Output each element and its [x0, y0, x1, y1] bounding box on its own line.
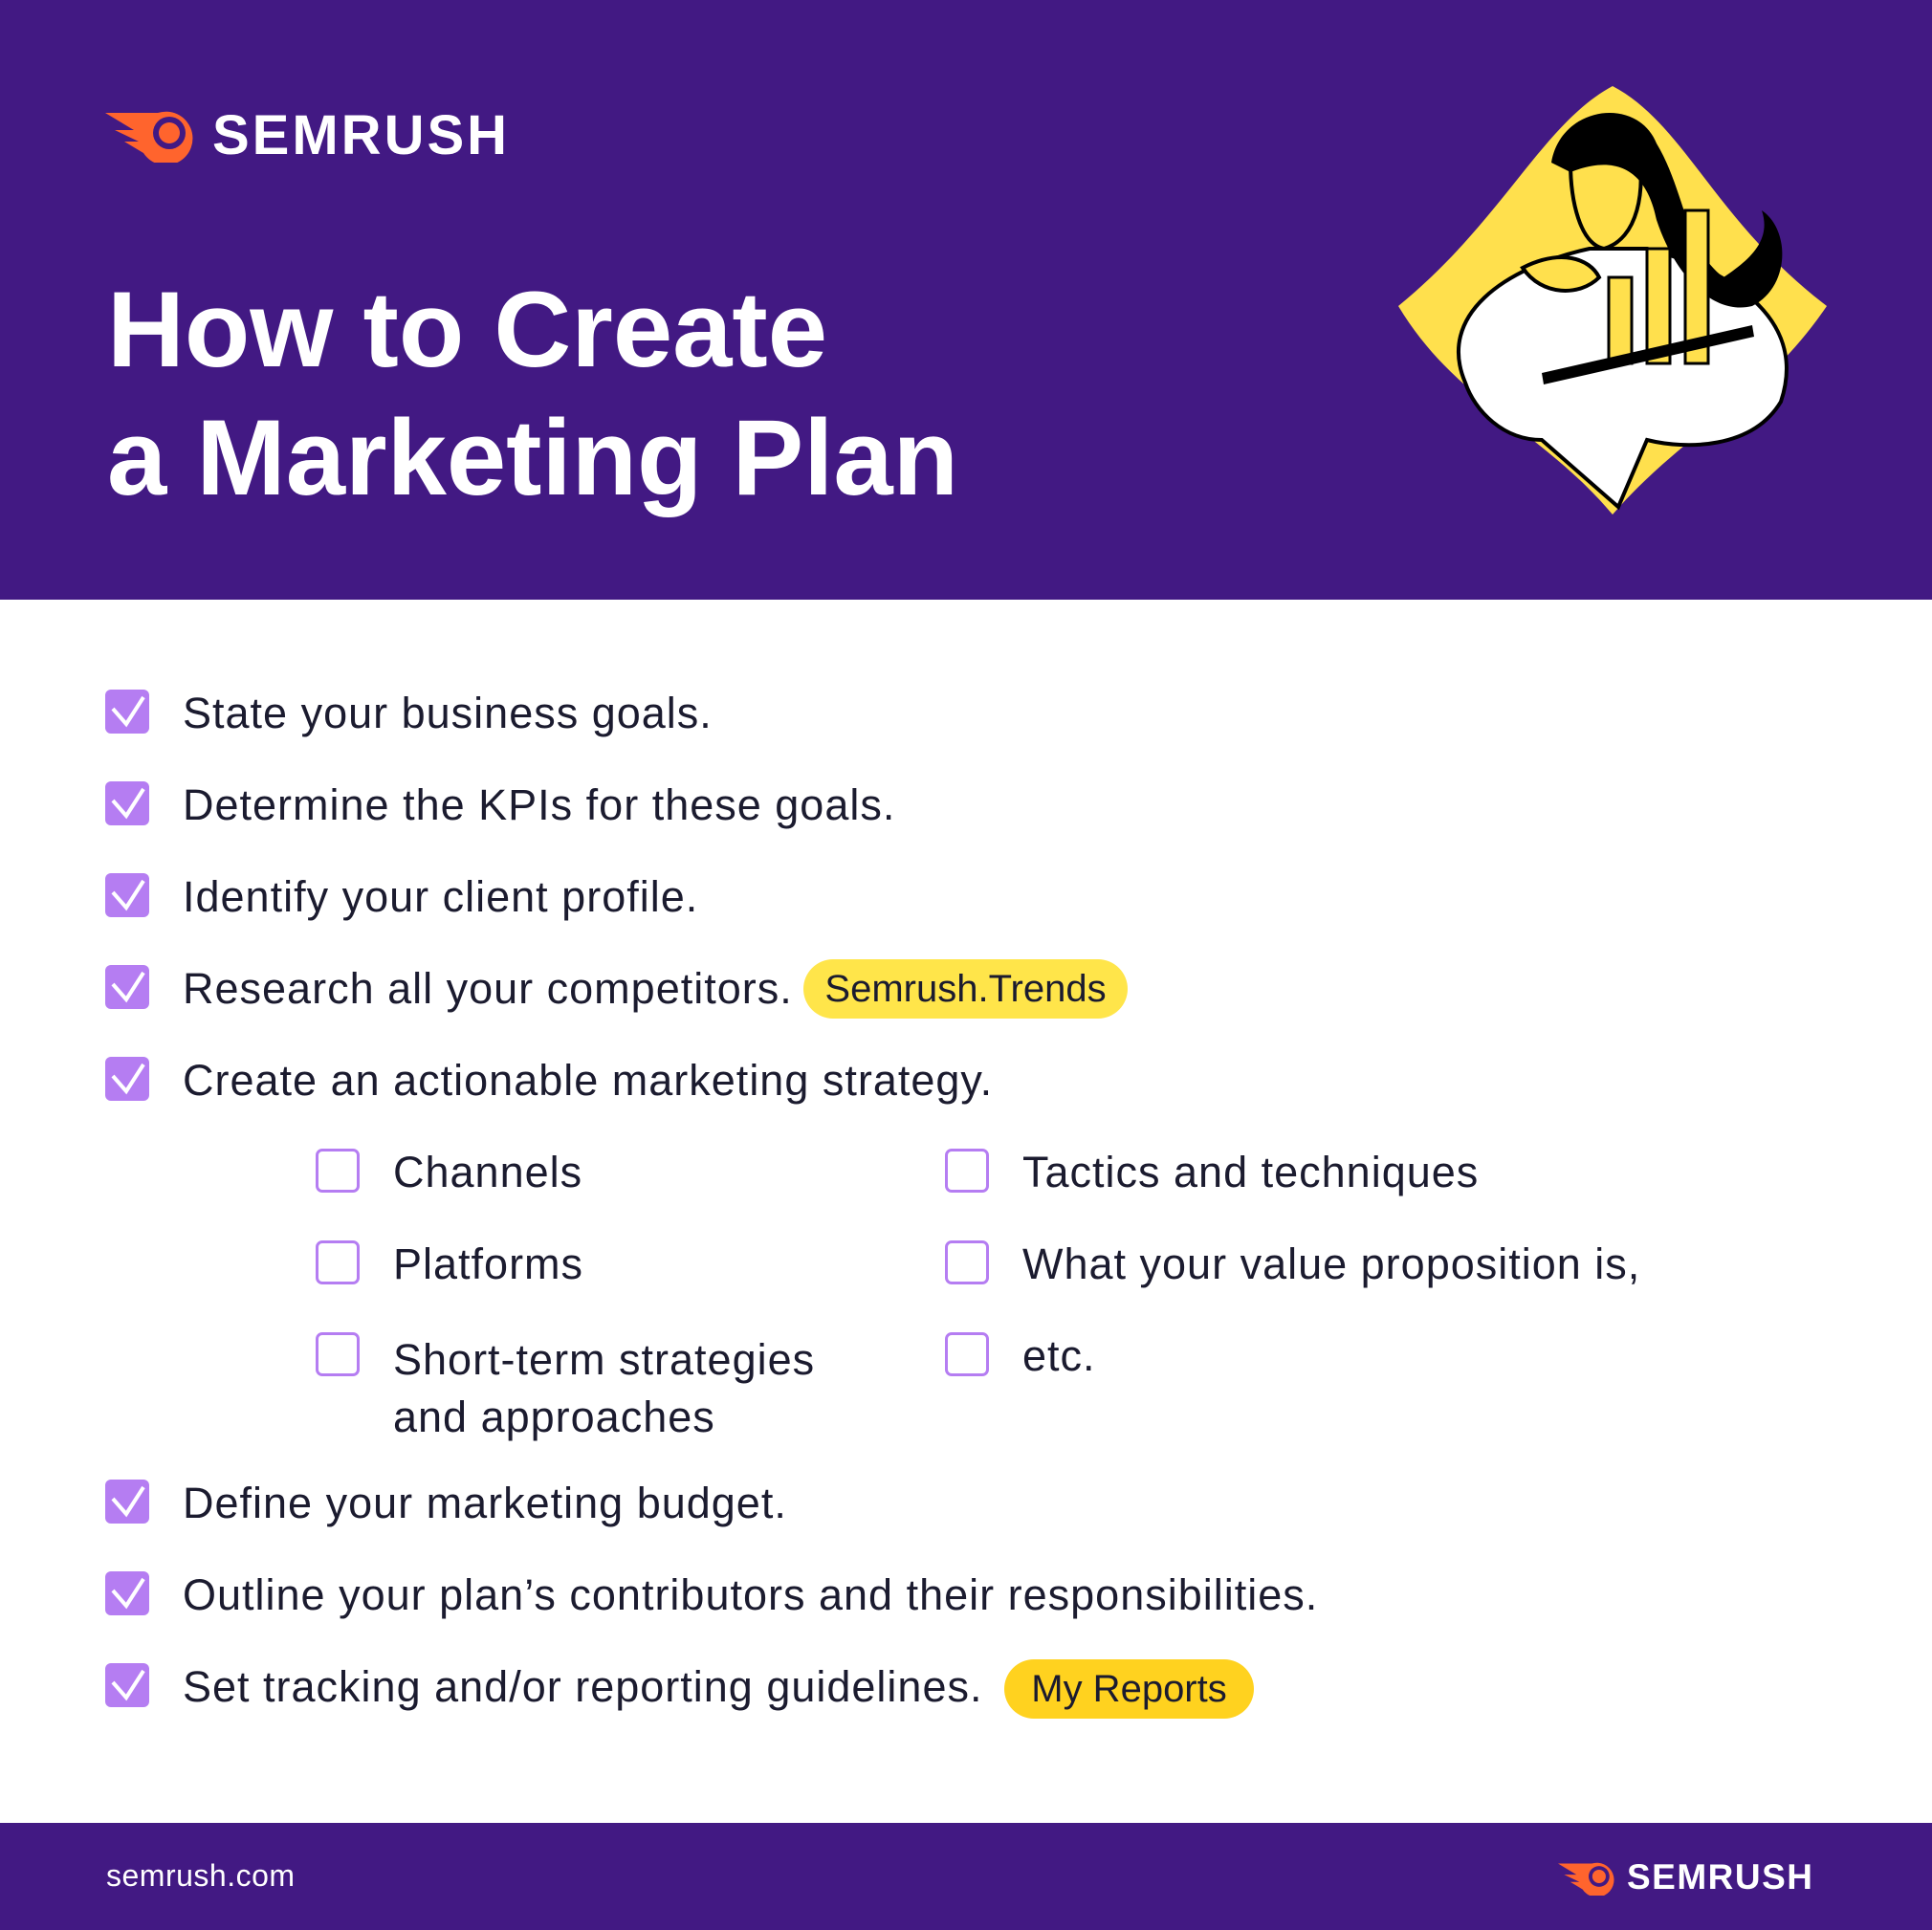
pill: Semrush.Trends: Semrush.Trends — [824, 968, 1107, 1010]
checklist — [105, 689, 1640, 1719]
sub-items — [316, 1149, 360, 1193]
checklist: Determine the KPIs for these goals. — [183, 780, 895, 829]
title: a Marketing Plan — [107, 398, 958, 517]
checklist: Set tracking and/or reporting guidelines. — [183, 1662, 982, 1711]
footer url: semrush.com — [106, 1858, 296, 1893]
header band — [0, 0, 1932, 600]
checklist: State your business goals. — [183, 689, 713, 737]
item 2 — [105, 781, 149, 825]
checklist: Identify your client profile. — [183, 872, 698, 921]
item 8 — [105, 1663, 149, 1707]
item 4 — [105, 965, 149, 1009]
pill: Semrush.Trends — [803, 959, 1128, 1019]
title — [107, 270, 958, 517]
item 5 — [105, 1057, 149, 1101]
checklist: etc. — [1022, 1331, 1096, 1380]
checklist: What your value proposition is, — [1022, 1239, 1640, 1288]
item 6 — [105, 1480, 149, 1524]
checklist: Research all your competitors. — [183, 964, 793, 1013]
pill: My Reports — [1004, 1659, 1254, 1719]
checklist: Outline your plan’s contributors and their responsibilities. — [183, 1570, 1318, 1619]
item 7 — [105, 1571, 149, 1615]
checklist: and approaches — [393, 1393, 715, 1441]
checklist: Create an actionable marketing strategy. — [183, 1056, 993, 1105]
pill: My Reports: My Reports — [1031, 1668, 1227, 1710]
checklist: Define your marketing budget. — [183, 1479, 787, 1527]
logo: SEMRUSH — [212, 104, 510, 166]
checklist: Short-term strategies — [393, 1335, 815, 1384]
footer — [0, 1823, 1932, 1930]
illustration — [1398, 86, 1827, 515]
checklist: Channels — [393, 1148, 582, 1196]
checklist: Tactics and techniques — [1022, 1148, 1479, 1196]
title: How to Create — [107, 270, 827, 389]
item 3 — [105, 873, 149, 917]
footer logo: SEMRUSH — [1627, 1857, 1814, 1897]
checklist: Platforms — [393, 1239, 583, 1288]
item 1 — [105, 690, 149, 734]
